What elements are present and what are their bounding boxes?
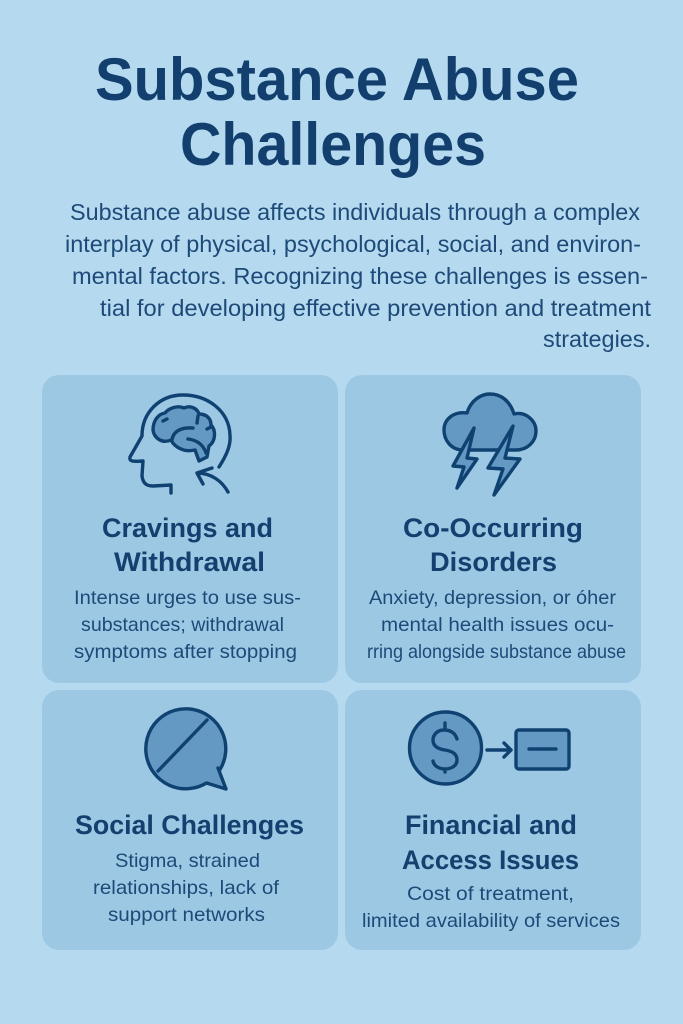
icon: speech bubble with slash xyxy=(146,709,226,789)
description: social challenges: support networks xyxy=(108,904,265,926)
heading: cravings and withdrawal: Cravings and xyxy=(102,513,273,543)
description: co-occurring disorders: Anxiety, depression, or óher xyxy=(369,587,617,609)
intro text block: tial for developing effective prevention and treatment xyxy=(100,295,652,321)
heading: financial and access issues: Access Issues xyxy=(402,845,579,875)
heading: co-occurring disorders: Disorders xyxy=(430,547,557,577)
description: financial and access issues: limited availability of services xyxy=(362,910,620,932)
title: Substance Abuse xyxy=(95,46,579,113)
intro text block: Substance abuse affects individuals through a complex xyxy=(70,199,641,225)
icon: head with brain xyxy=(130,395,230,493)
panel: social challenges xyxy=(42,690,338,950)
heading: financial and access issues xyxy=(402,810,579,875)
description: social challenges: relationships, lack of xyxy=(93,877,280,899)
panel: cravings and withdrawal xyxy=(42,375,338,683)
description: co-occurring disorders: mental health issues ocu- xyxy=(381,614,614,636)
intro text block xyxy=(65,199,652,352)
title: Challenges xyxy=(180,111,486,178)
panel: co-occurring disorders xyxy=(345,375,641,683)
description: cravings and withdrawal: symptoms after stopping xyxy=(74,641,297,663)
description: cravings and withdrawal: substances; withdrawal xyxy=(81,614,284,636)
description: cravings and withdrawal xyxy=(74,587,301,663)
intro text block: interplay of physical, psychological, social, and environ- xyxy=(65,231,641,257)
heading: cravings and withdrawal: Withdrawal xyxy=(114,547,265,577)
icon: dollar coin, arrow and card xyxy=(410,712,569,784)
icon: storm cloud with lightning xyxy=(444,394,536,495)
title xyxy=(95,46,579,178)
description: cravings and withdrawal: Intense urges to use sus- xyxy=(74,587,301,609)
intro text block: strategies. xyxy=(543,326,651,352)
panel: financial and access issues xyxy=(345,690,641,950)
description: co-occurring disorders: rring alongside substance abuse xyxy=(367,641,626,663)
heading: co-occurring disorders xyxy=(403,513,583,577)
description: financial and access issues: Cost of treatment, xyxy=(407,883,574,905)
heading: cravings and withdrawal xyxy=(102,513,273,577)
heading: financial and access issues: Financial and xyxy=(405,810,577,840)
description: co-occurring disorders xyxy=(367,587,626,663)
description: social challenges xyxy=(93,850,280,926)
intro text block: mental factors. Recognizing these challenges is essen- xyxy=(72,263,648,289)
heading: social challenges: Social Challenges xyxy=(75,810,304,840)
description: social challenges: Stigma, strained xyxy=(115,850,260,872)
description: financial and access issues xyxy=(362,883,620,932)
heading: co-occurring disorders: Co-Occurring xyxy=(403,513,583,543)
